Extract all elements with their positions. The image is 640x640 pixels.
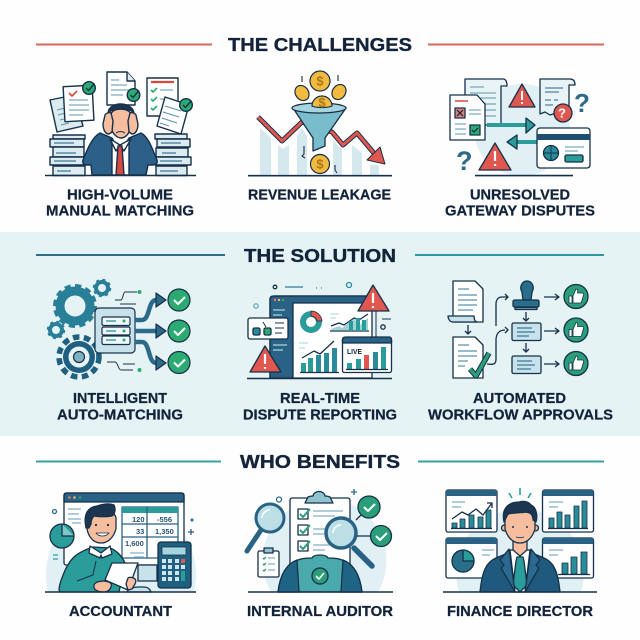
label: automated workflow approvals: AUTOMATED [473,391,566,407]
spreadsheet figures: 33 [136,527,144,536]
label: real-time dispute reporting: DISPUTE REPORTING [243,408,397,424]
label: internal auditor: INTERNAL AUDITOR [247,604,394,620]
icon: internal auditor with magnifiers [247,489,393,592]
icon: accountant at spreadsheet [45,493,196,592]
spreadsheet figures: 120 [132,515,145,524]
label: intelligent auto-matching: AUTO-MATCHING [57,408,183,424]
label: intelligent auto-matching: INTELLIGENT [73,391,167,407]
icon: intelligent auto-matching gears and checks [48,280,190,377]
icon: question marks: ? [456,146,472,176]
label: revenue leakage: REVENUE LEAKAGE [248,188,391,204]
icon: question marks: ? [558,106,566,120]
icon: automated workflow approvals [448,281,588,378]
icon: finance director with dashboards [443,488,597,592]
section: the solution [36,245,613,424]
panel: solution band background [0,232,640,436]
label: accountant: ACCOUNTANT [69,604,172,620]
icon: real-time dispute dashboard [247,282,392,378]
icon: overwhelmed clerk with paperwork [45,72,196,176]
live tag: LIVE [347,349,362,356]
heading: the challenges: THE CHALLENGES [228,34,412,55]
icon: unresolved gateway disputes [450,79,590,176]
heading: who benefits: WHO BENEFITS [240,451,400,472]
label: high-volume manual matching: HIGH-VOLUME [67,188,173,204]
label: unresolved gateway disputes: UNRESOLVED [470,188,570,204]
label: finance director: FINANCE DIRECTOR [447,604,594,620]
spreadsheet figures: 1,600 [125,539,144,548]
coin dollar signs: $ [316,74,324,88]
spreadsheet figures: 1,350 [155,527,174,536]
heading: the solution: THE SOLUTION [244,245,396,266]
icon: revenue leakage funnel [258,71,385,175]
coin dollar signs: $ [316,156,324,172]
label: unresolved gateway disputes: GATEWAY DISPUTES [445,204,595,220]
section: the challenges [36,34,604,220]
label: high-volume manual matching: MANUAL MATCHING [46,204,194,220]
baseline rule [248,175,392,177]
label: real-time dispute reporting: REAL-TIME [280,391,360,407]
icon: question marks: ? [574,88,590,118]
spreadsheet figures: -556 [157,515,172,524]
section: who benefits [36,451,604,620]
coin dollar signs: $ [318,95,326,110]
label: automated workflow approvals: WORKFLOW APPROVALS [428,408,613,424]
